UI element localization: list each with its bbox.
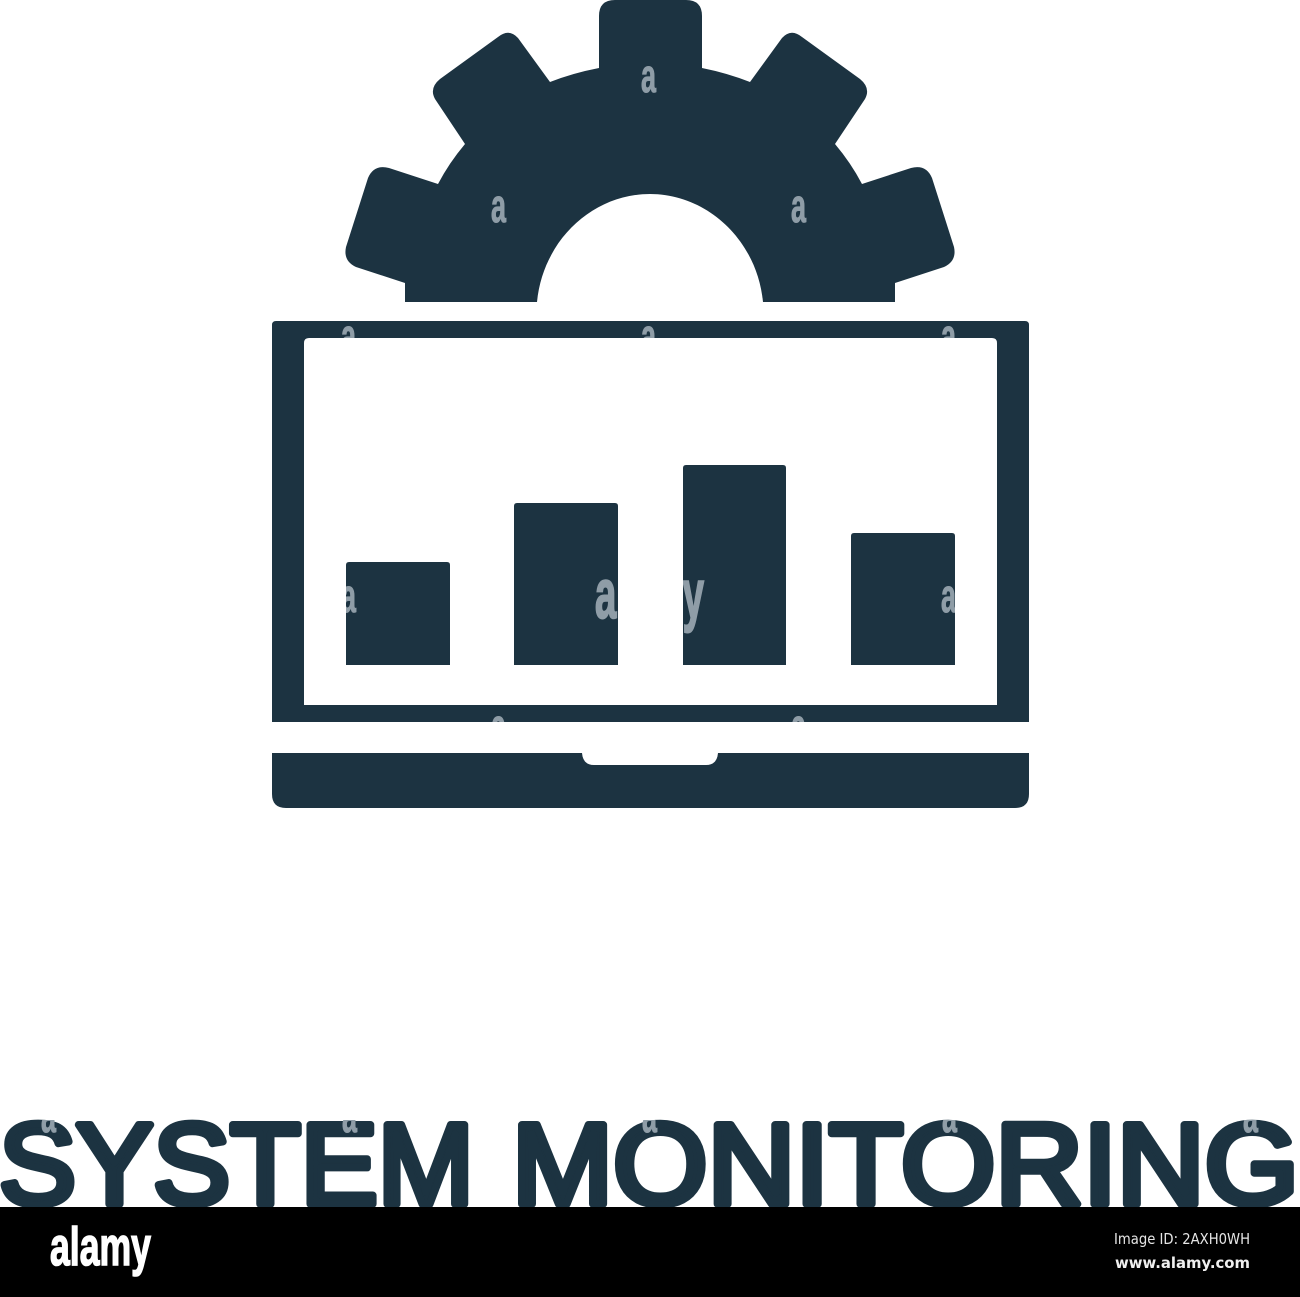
watermark on icon: a: [341, 569, 356, 622]
watermark on title: a: [342, 1089, 357, 1142]
watermark on icon: a: [791, 699, 806, 752]
watermark on title: a: [942, 1089, 957, 1142]
watermark on icon: a: [641, 49, 656, 102]
watermark on icon: a: [941, 309, 956, 362]
watermark on icon: a: [641, 309, 656, 362]
watermark on icon: a: [941, 569, 956, 622]
title: MONITORING: [512, 1101, 1299, 1229]
watermark on icon: a: [791, 179, 806, 232]
watermark on icon: [341, 49, 956, 752]
image id: Image ID: 2AXH0WH: [1114, 1230, 1250, 1248]
bar 3: [683, 465, 786, 665]
watermark on icon: a: [491, 179, 506, 232]
icon: laptop: [272, 321, 1029, 808]
watermark on icon: a: [491, 699, 506, 752]
watermark on title: [42, 1120, 1258, 1133]
bar 2: [514, 503, 618, 665]
website: www.alamy.com: [1115, 1254, 1250, 1272]
title: SYSTEM: [0, 1101, 474, 1229]
laptop screen frame: [272, 321, 1029, 722]
watermark on icon: a: [341, 309, 356, 362]
watermark on title: a: [1243, 1089, 1258, 1142]
bar chart: [346, 465, 955, 665]
footer bar: [0, 1207, 1300, 1297]
bar 1: [346, 562, 450, 665]
footer logo: alamy: [50, 1217, 151, 1277]
watermark on title: a: [41, 1089, 56, 1142]
laptop base: [272, 753, 1029, 808]
icon: gear: [345, 0, 955, 302]
title: [0, 1101, 1299, 1229]
watermark on icon: alamy: [595, 555, 704, 633]
watermark on title: a: [642, 1089, 657, 1142]
bar 4: [851, 533, 955, 665]
